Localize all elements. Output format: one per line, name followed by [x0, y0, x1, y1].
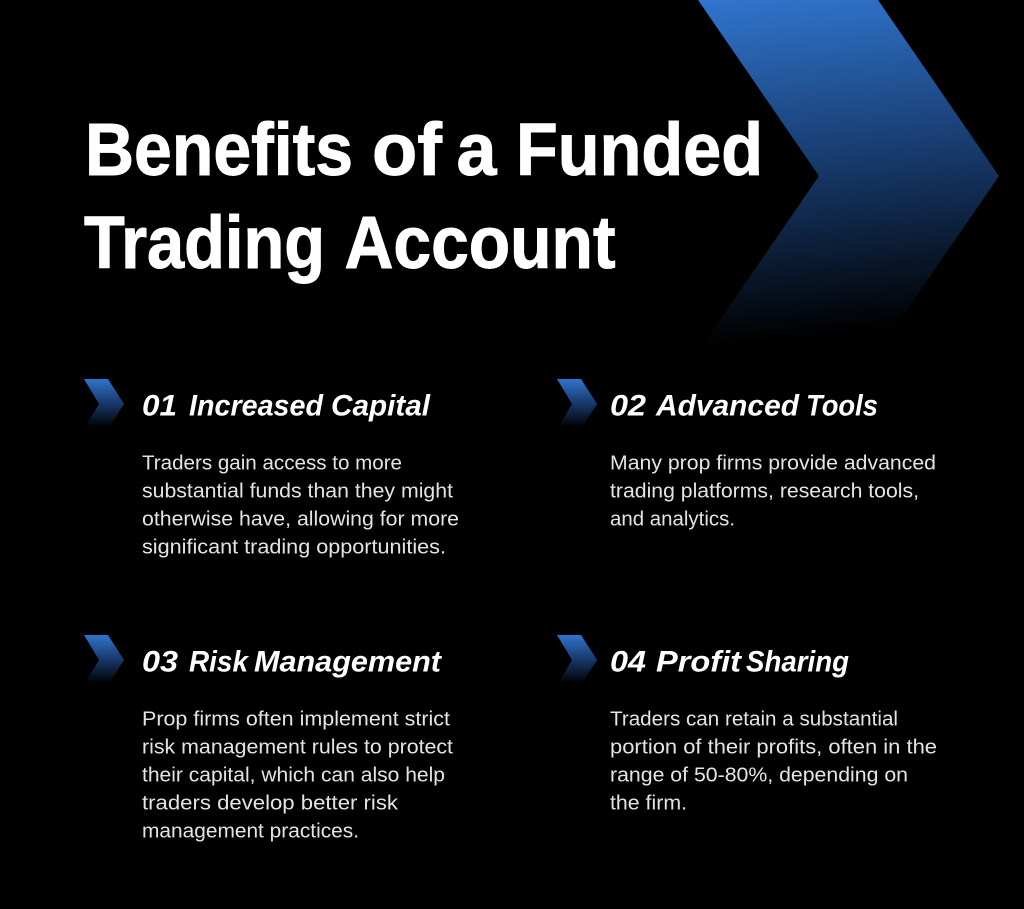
- title: Funded: [516, 108, 763, 191]
- heading: 01 Increased Capital: Capital: [331, 390, 431, 422]
- panel: 04 Profit Sharing: [557, 635, 937, 814]
- heading: 02 Advanced Tools: Tools: [806, 390, 878, 422]
- text block: 02: trading platforms, research tools,: [610, 480, 919, 502]
- text block: 04: range of 50-80%, depending on: [610, 764, 908, 786]
- heading: 03 Risk Management: Management: [254, 646, 443, 678]
- text block: 03: risk management rules to protect: [142, 736, 453, 758]
- text block: 02: Many prop firms provide advanced: [610, 452, 936, 474]
- text block: 03: Prop firms often implement strict: [142, 708, 450, 730]
- heading: 04 Profit Sharing: Profit: [656, 646, 743, 678]
- title: of: [372, 108, 442, 191]
- heading: 03 Risk Management: 03: [142, 646, 178, 678]
- text block: 02: and analytics.: [610, 508, 735, 530]
- text block: 02: [610, 452, 936, 530]
- heading: 04 Profit Sharing: 04: [610, 646, 646, 678]
- heading: 03 Risk Management: [142, 646, 443, 678]
- heading: 02 Advanced Tools: 02: [610, 390, 646, 422]
- icon: chevron 01: [84, 379, 124, 429]
- large chevron arrow: [698, 0, 999, 352]
- text block: 03: traders develop better risk: [142, 792, 399, 814]
- heading: 02 Advanced Tools: Advanced: [655, 390, 800, 422]
- icon: chevron 02: [557, 379, 597, 429]
- title: Trading: [84, 201, 325, 284]
- icon: chevron 03: [84, 635, 124, 685]
- title: [84, 108, 763, 284]
- text block: 04: portion of their profits, often in the: [610, 736, 937, 758]
- text block: 01: Traders gain access to more: [142, 452, 402, 474]
- title: Benefits: [85, 108, 353, 191]
- text block: 03: their capital, which can also help: [142, 764, 445, 786]
- text block: 01: otherwise have, allowing for more: [142, 508, 459, 530]
- panel: 02 Advanced Tools: [557, 379, 936, 530]
- heading: 01 Increased Capital: Increased: [189, 390, 324, 422]
- text block: 04: [610, 708, 937, 814]
- text block: 03: management practices.: [142, 820, 359, 842]
- text block: 04: Traders can retain a substantial: [610, 708, 898, 730]
- icon: chevron 04: [557, 635, 597, 685]
- heading: 01 Increased Capital: 01: [142, 390, 177, 422]
- heading: 03 Risk Management: Risk: [189, 646, 249, 678]
- heading: 02 Advanced Tools: [610, 390, 878, 422]
- title: a: [456, 108, 497, 191]
- text block: 01: substantial funds than they might: [142, 480, 453, 502]
- heading: 04 Profit Sharing: Sharing: [746, 646, 849, 678]
- heading: 01 Increased Capital: [142, 390, 431, 422]
- title: Account: [344, 201, 616, 284]
- text block: 01: significant trading opportunities.: [142, 536, 446, 558]
- panel: 03 Risk Management: [84, 635, 453, 842]
- panel: 01 Increased Capital: [84, 379, 459, 558]
- text block: 01: [142, 452, 459, 558]
- heading: 04 Profit Sharing: [610, 646, 849, 678]
- text block: 03: [142, 708, 453, 842]
- text block: 04: the firm.: [610, 792, 687, 814]
